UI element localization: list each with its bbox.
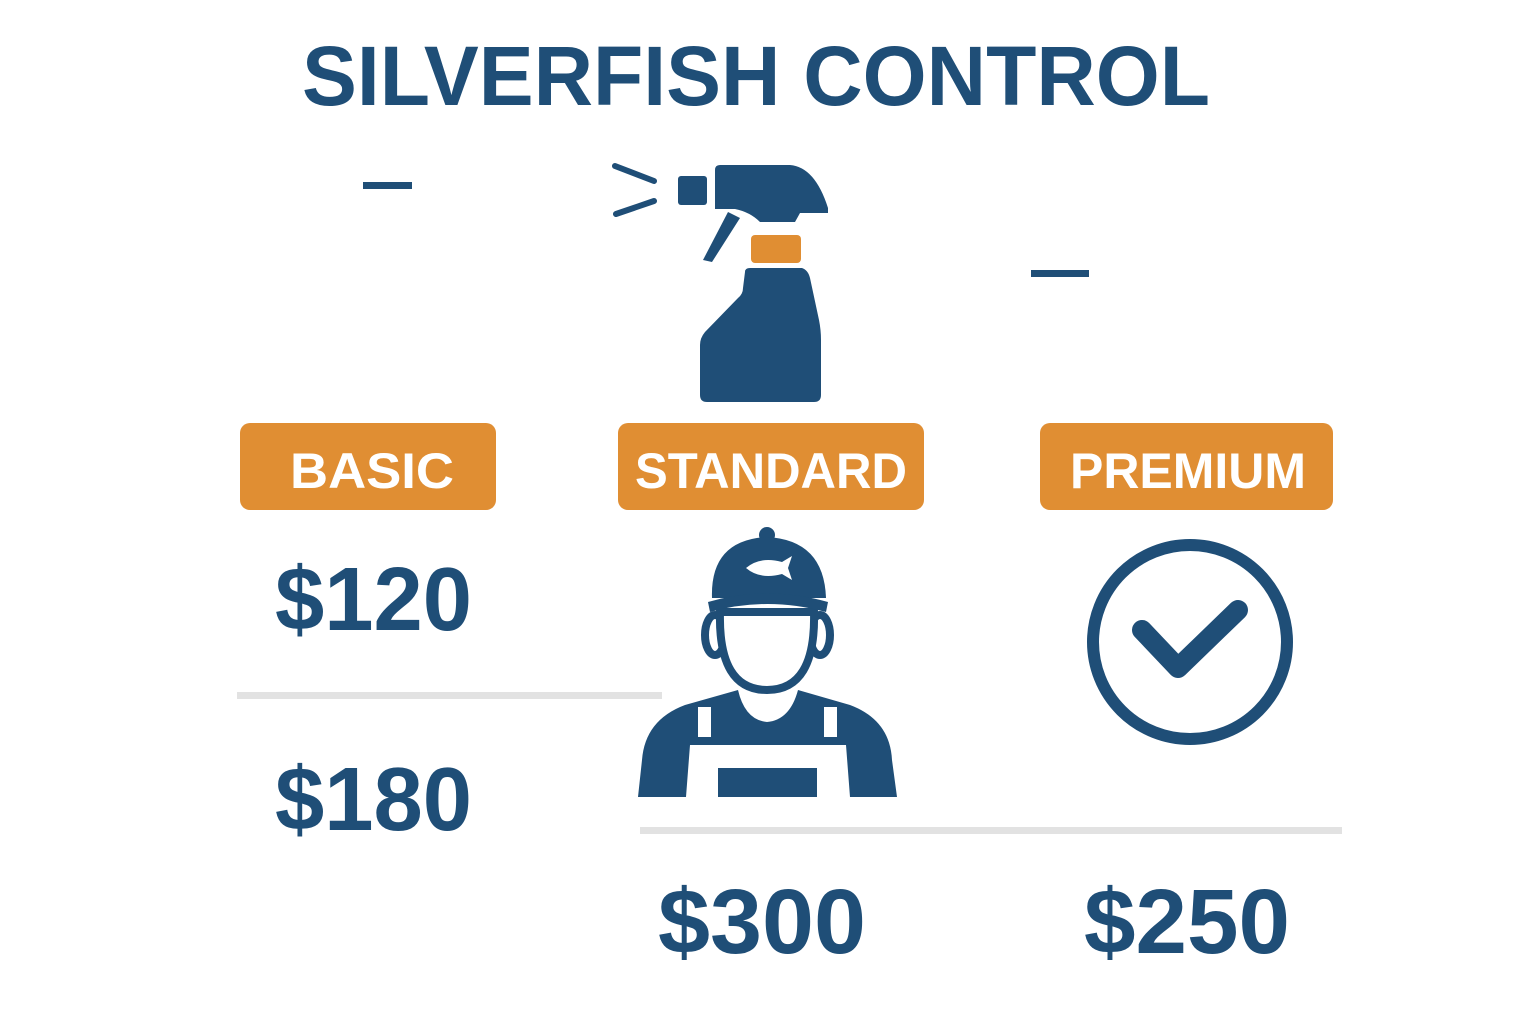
- label: basic: BASIC: [290, 443, 454, 499]
- divider right: [640, 827, 1342, 834]
- label: standard: STANDARD: [635, 443, 907, 499]
- label: standard: [618, 423, 924, 510]
- price: $250: $250: [1084, 871, 1290, 973]
- title: SILVERFISH CONTROL: [302, 29, 1210, 123]
- dash left: [363, 182, 412, 189]
- icon: check circle: [1093, 545, 1287, 739]
- label: premium: PREMIUM: [1070, 443, 1306, 499]
- price: $300: $300: [658, 871, 866, 973]
- dash right: [1031, 270, 1089, 277]
- icon: spray bottle: [615, 165, 828, 402]
- label: basic: [240, 423, 496, 510]
- label: premium: [1040, 423, 1333, 510]
- price: $180: $180: [275, 750, 472, 850]
- icon: worker: [638, 527, 897, 797]
- price: $120: $120: [275, 550, 472, 650]
- divider left: [237, 692, 662, 699]
